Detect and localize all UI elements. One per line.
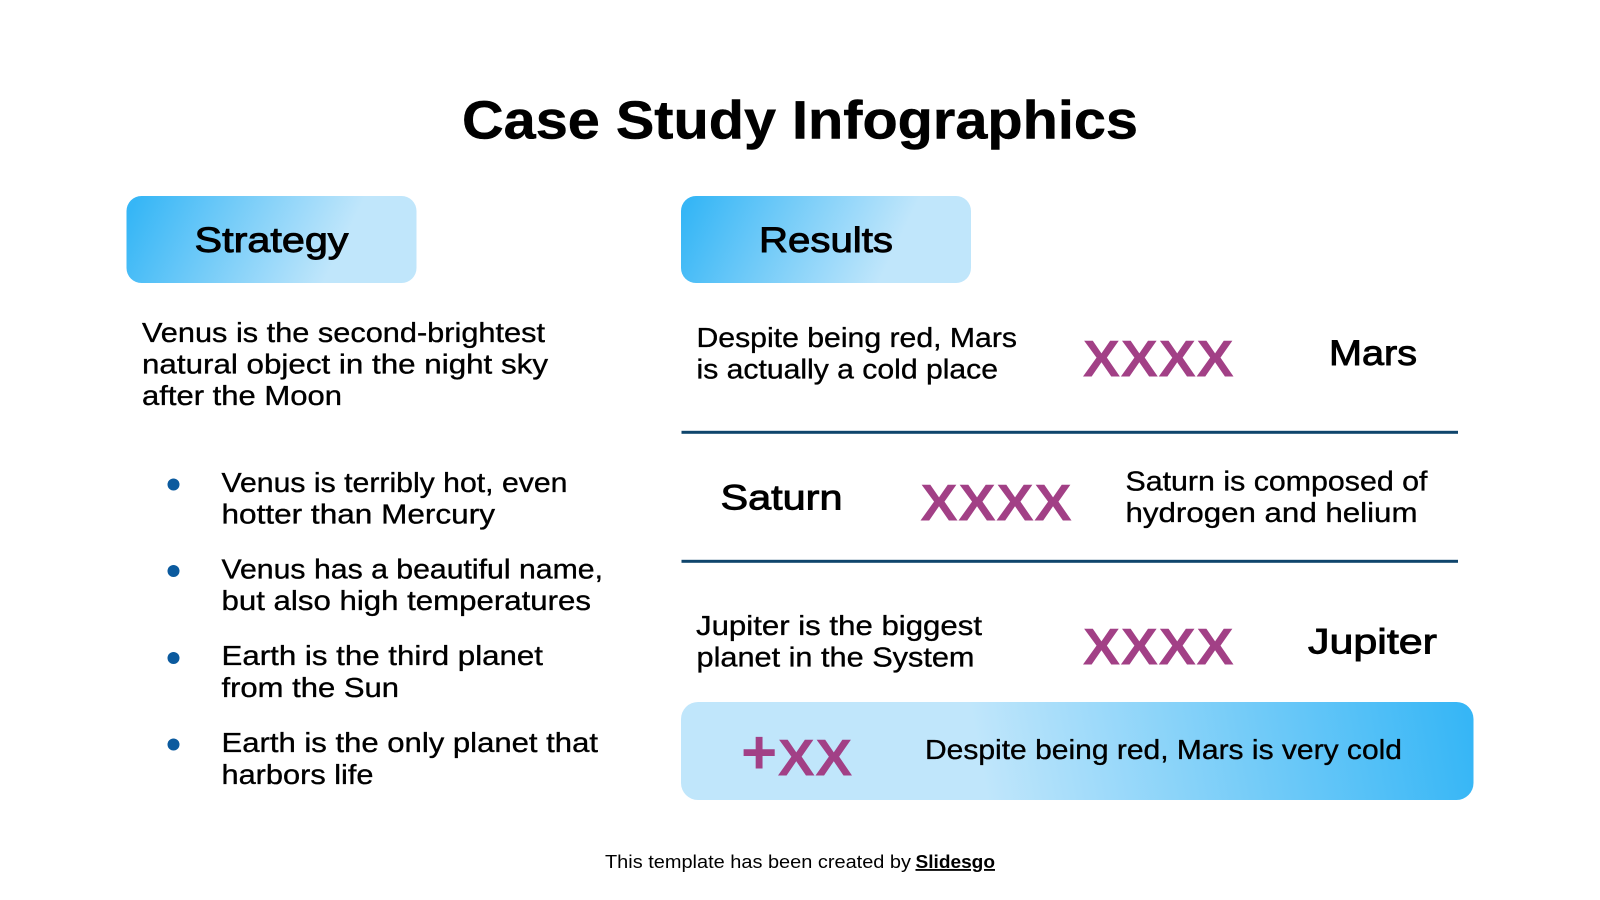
row: Jupiter: Jupiter is the biggest: [696, 610, 982, 641]
callout bar: Despite being red, Mars is very cold: [925, 734, 1402, 765]
row: Saturn: hydrogen and helium: [1126, 497, 1418, 528]
footer credit: This template has been created by: [605, 851, 912, 872]
callout bar: +: [741, 718, 777, 788]
row: Mars: Despite being red, Mars: [696, 322, 1017, 353]
bullet 4: harbors life: [222, 759, 374, 790]
row: Mars: [696, 322, 1417, 388]
strategy intro text: after the Moon: [142, 380, 342, 411]
bullet 2: [168, 554, 603, 616]
callout bar: [681, 702, 1474, 800]
panel: results: [681, 196, 1474, 800]
row: Mars: is actually a cold place: [696, 354, 998, 384]
row: Saturn: [720, 466, 1428, 532]
row: Saturn: Saturn is composed of: [1126, 466, 1428, 496]
title: Case Study Infographics: [462, 90, 1138, 150]
bullet 1: [168, 467, 568, 530]
footer credit: Slidesgo: [916, 851, 995, 872]
bullet 3: Earth is the third planet: [222, 640, 543, 671]
bullet 2: Venus has a beautiful name,: [222, 554, 603, 584]
row: Jupiter: planet in the System: [696, 642, 974, 672]
panel: strategy: [126, 196, 603, 790]
callout bar: XX: [778, 730, 853, 788]
bullet 1: hotter than Mercury: [222, 498, 495, 530]
strategy heading: [126, 196, 416, 283]
bullet list: [168, 467, 603, 790]
row: Jupiter: XXXX: [1082, 618, 1234, 676]
strategy heading: Strategy: [194, 221, 349, 260]
row: Mars: XXXX: [1082, 330, 1234, 388]
results heading: Results: [759, 221, 893, 260]
row: Mars: Mars: [1329, 334, 1417, 373]
bullet 1: Venus is terribly hot, even: [222, 467, 568, 498]
strategy intro text: Venus is the second-brightest: [142, 317, 545, 348]
row: Saturn: XXXX: [920, 474, 1072, 532]
bullet 3: from the Sun: [222, 672, 399, 703]
strategy intro text: natural object in the night sky: [142, 348, 548, 380]
bullet 4: Earth is the only planet that: [222, 727, 598, 758]
row: Saturn: Saturn: [720, 478, 842, 518]
bullet 4: [168, 727, 598, 790]
results heading: [681, 196, 971, 283]
bullet 3: [168, 640, 543, 703]
row: Jupiter: [696, 610, 1437, 676]
strategy intro text: [142, 317, 548, 411]
row: Jupiter: Jupiter: [1308, 622, 1437, 662]
bullet 2: but also high temperatures: [222, 585, 591, 616]
